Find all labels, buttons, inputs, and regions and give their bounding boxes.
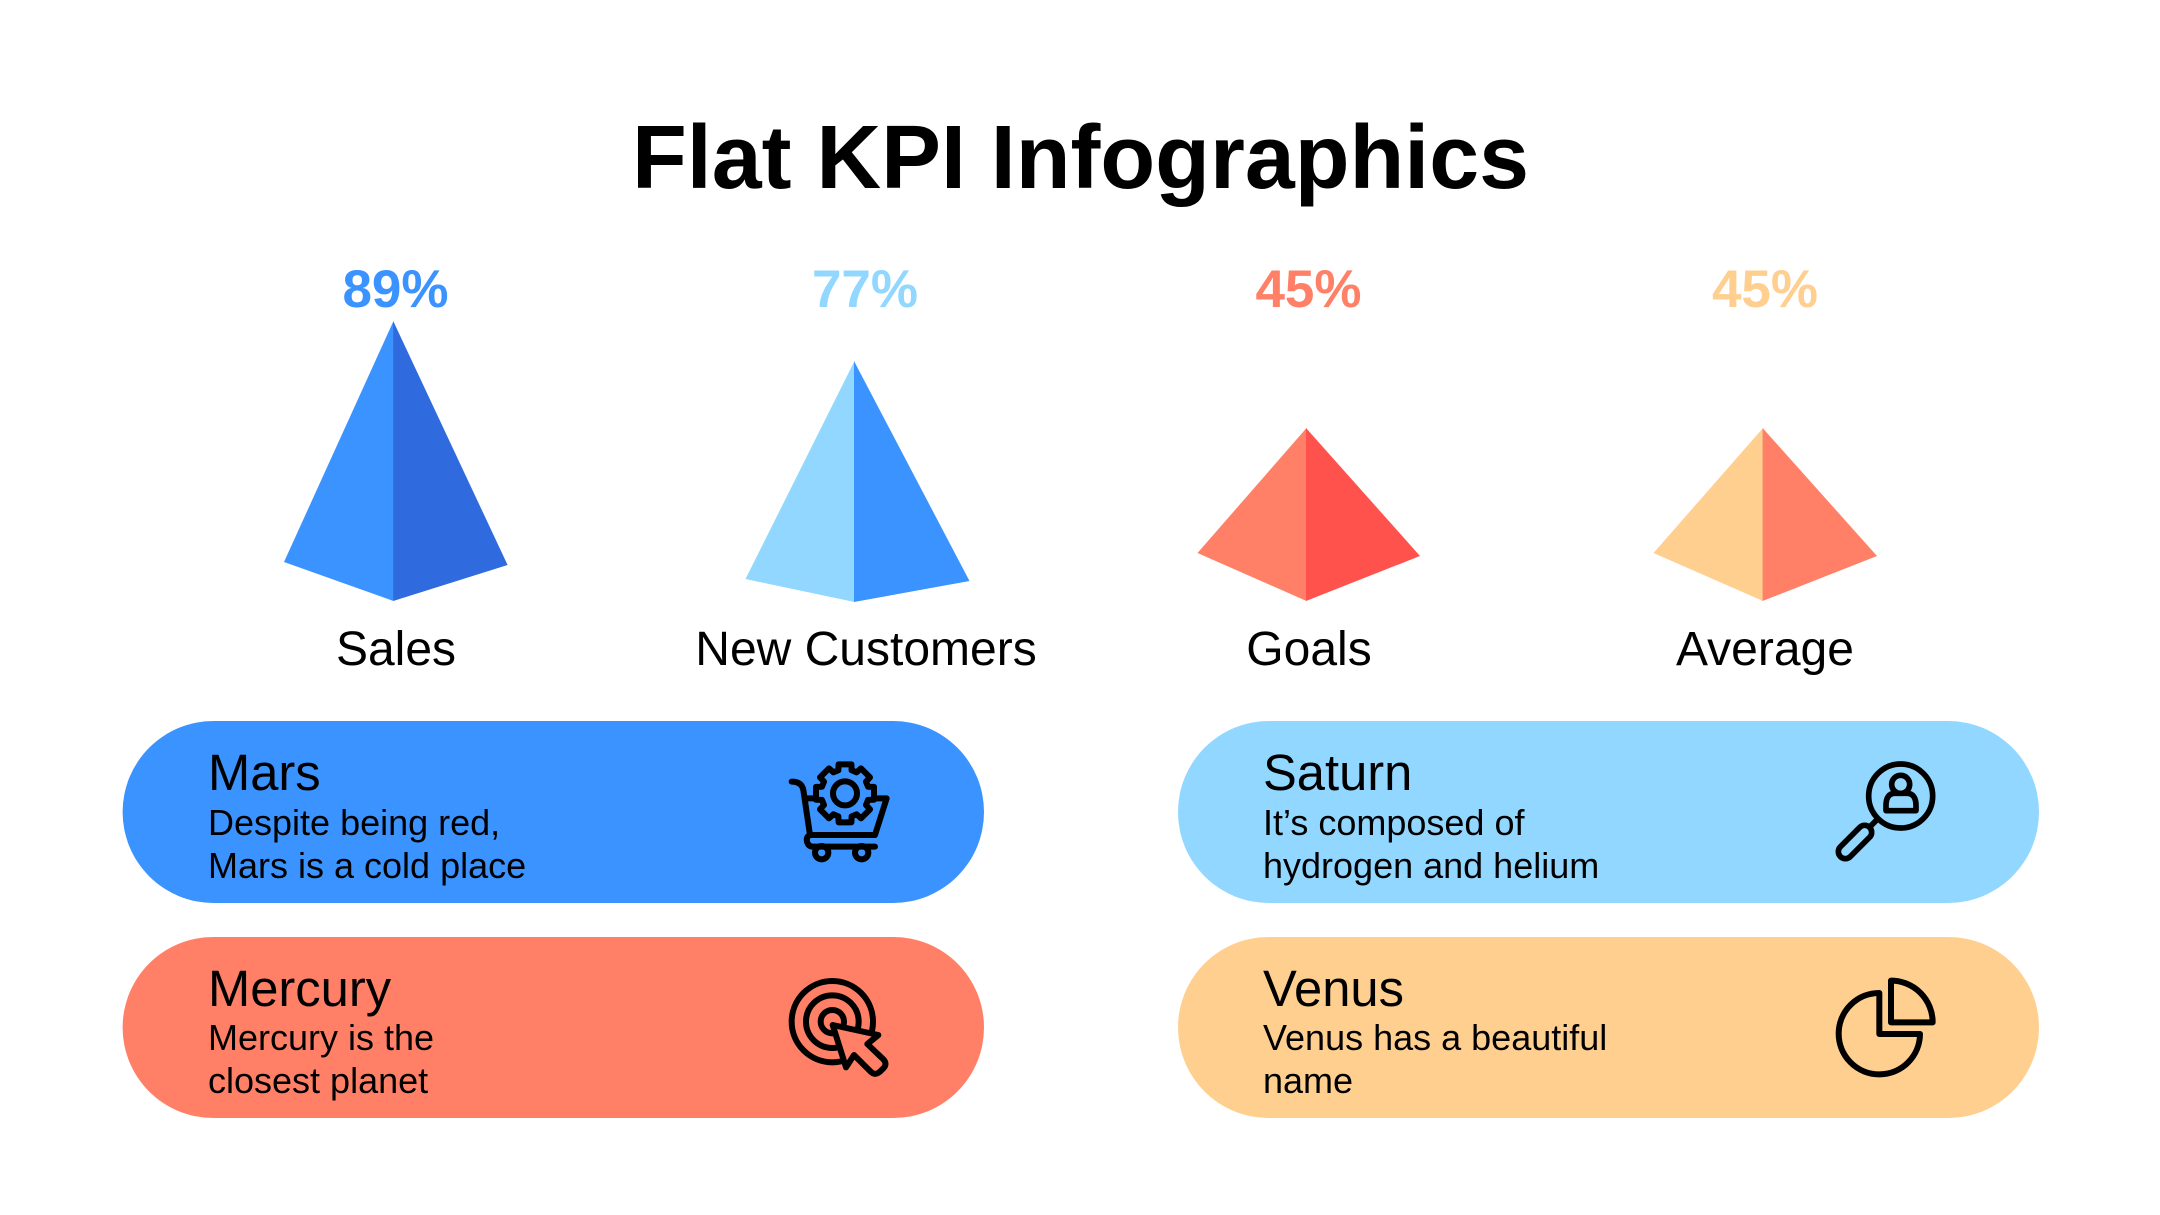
label: Sales: Sales: [336, 623, 456, 676]
title: Flat KPI Infographics: [632, 108, 1529, 208]
text: Venus description: name: [1263, 1060, 1353, 1101]
heading: Mercury: Mercury: [208, 960, 392, 1017]
panel: Mars: [123, 721, 984, 903]
value: 77%: 77%: [812, 260, 918, 319]
KPI: Sales: [284, 260, 508, 676]
panel: Mercury: [123, 937, 984, 1118]
pyramid: Average: [1654, 428, 1877, 601]
icon: target with cursor: [792, 981, 885, 1074]
text: Saturn description: hydrogen and helium: [1263, 845, 1599, 886]
icon: pie chart: [1839, 981, 1933, 1074]
label: Goals: Goals: [1246, 623, 1372, 676]
icon: cart with gear: [792, 764, 887, 859]
value: 45%: 45%: [1712, 260, 1818, 319]
heading: Mars: Mars: [208, 744, 321, 801]
label: Average: Average: [1676, 623, 1854, 676]
pyramid: Goals: [1198, 428, 1420, 601]
value: 89%: 89%: [342, 260, 449, 319]
icon: magnifier with person: [1835, 764, 1933, 862]
KPI: New Customers: [695, 260, 1037, 676]
text: Mercury description: closest planet: [208, 1060, 428, 1101]
heading: Saturn: Saturn: [1263, 744, 1412, 801]
value: 45%: 45%: [1255, 260, 1362, 319]
panel: Saturn: [1178, 721, 2039, 903]
KPI: Average: [1654, 260, 1877, 676]
pyramid: Sales: [284, 321, 508, 601]
label: New Customers: New Customers: [695, 623, 1037, 676]
text: Mercury description: Mercury is the: [208, 1017, 434, 1058]
text: Saturn description: It’s composed of: [1263, 802, 1525, 843]
text: Venus description: Venus has a beautiful: [1263, 1017, 1607, 1058]
pyramid: New Customers: [746, 361, 970, 602]
panel: Venus: [1178, 937, 2039, 1118]
heading: Venus: Venus: [1263, 960, 1404, 1017]
text: Mars description: Despite being red,: [208, 802, 500, 843]
text: Mars description: Mars is a cold place: [208, 845, 526, 886]
KPI: Goals: [1198, 260, 1420, 676]
